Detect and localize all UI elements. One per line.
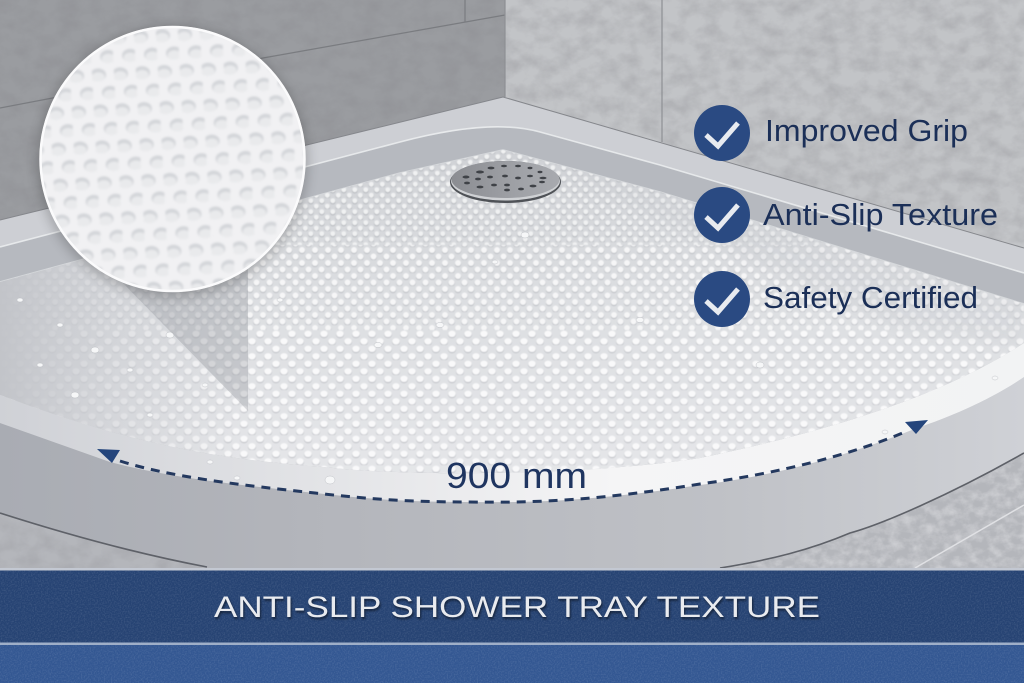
item: Safety Certified: Safety Certified: [763, 280, 978, 315]
magnifier pointer shadow: [123, 268, 248, 411]
item: Safety Certified: [694, 271, 978, 327]
item: Improved Grip: [694, 105, 968, 161]
title banner: [0, 568, 1024, 683]
item: Anti-Slip Texture: Anti-Slip Texture: [763, 197, 998, 232]
drain: [450, 161, 561, 203]
shower tray: [0, 97, 1024, 568]
item: Improved Grip: Improved Grip: [765, 113, 968, 148]
tray skirt: [0, 377, 1024, 568]
banner title: ANTI-SLIP SHOWER TRAY TEXTURE: [214, 591, 820, 624]
feature list: [694, 105, 998, 327]
tray rim: [0, 97, 1024, 400]
floor tiles: [0, 400, 1024, 575]
dimension arrow: 900 mm: [97, 420, 928, 502]
tray front lip: [0, 343, 1024, 502]
magnified texture circle: [38, 26, 308, 297]
wall: left tiles: [0, 0, 505, 240]
arrowhead left: [97, 449, 120, 463]
dimension label: 900 mm: [446, 455, 587, 496]
wall: right tiles: [505, 0, 1024, 270]
arrowhead right: [905, 420, 928, 434]
item: Anti-Slip Texture: [694, 187, 998, 243]
water droplets: [17, 232, 998, 484]
textured floor: [0, 140, 1024, 480]
